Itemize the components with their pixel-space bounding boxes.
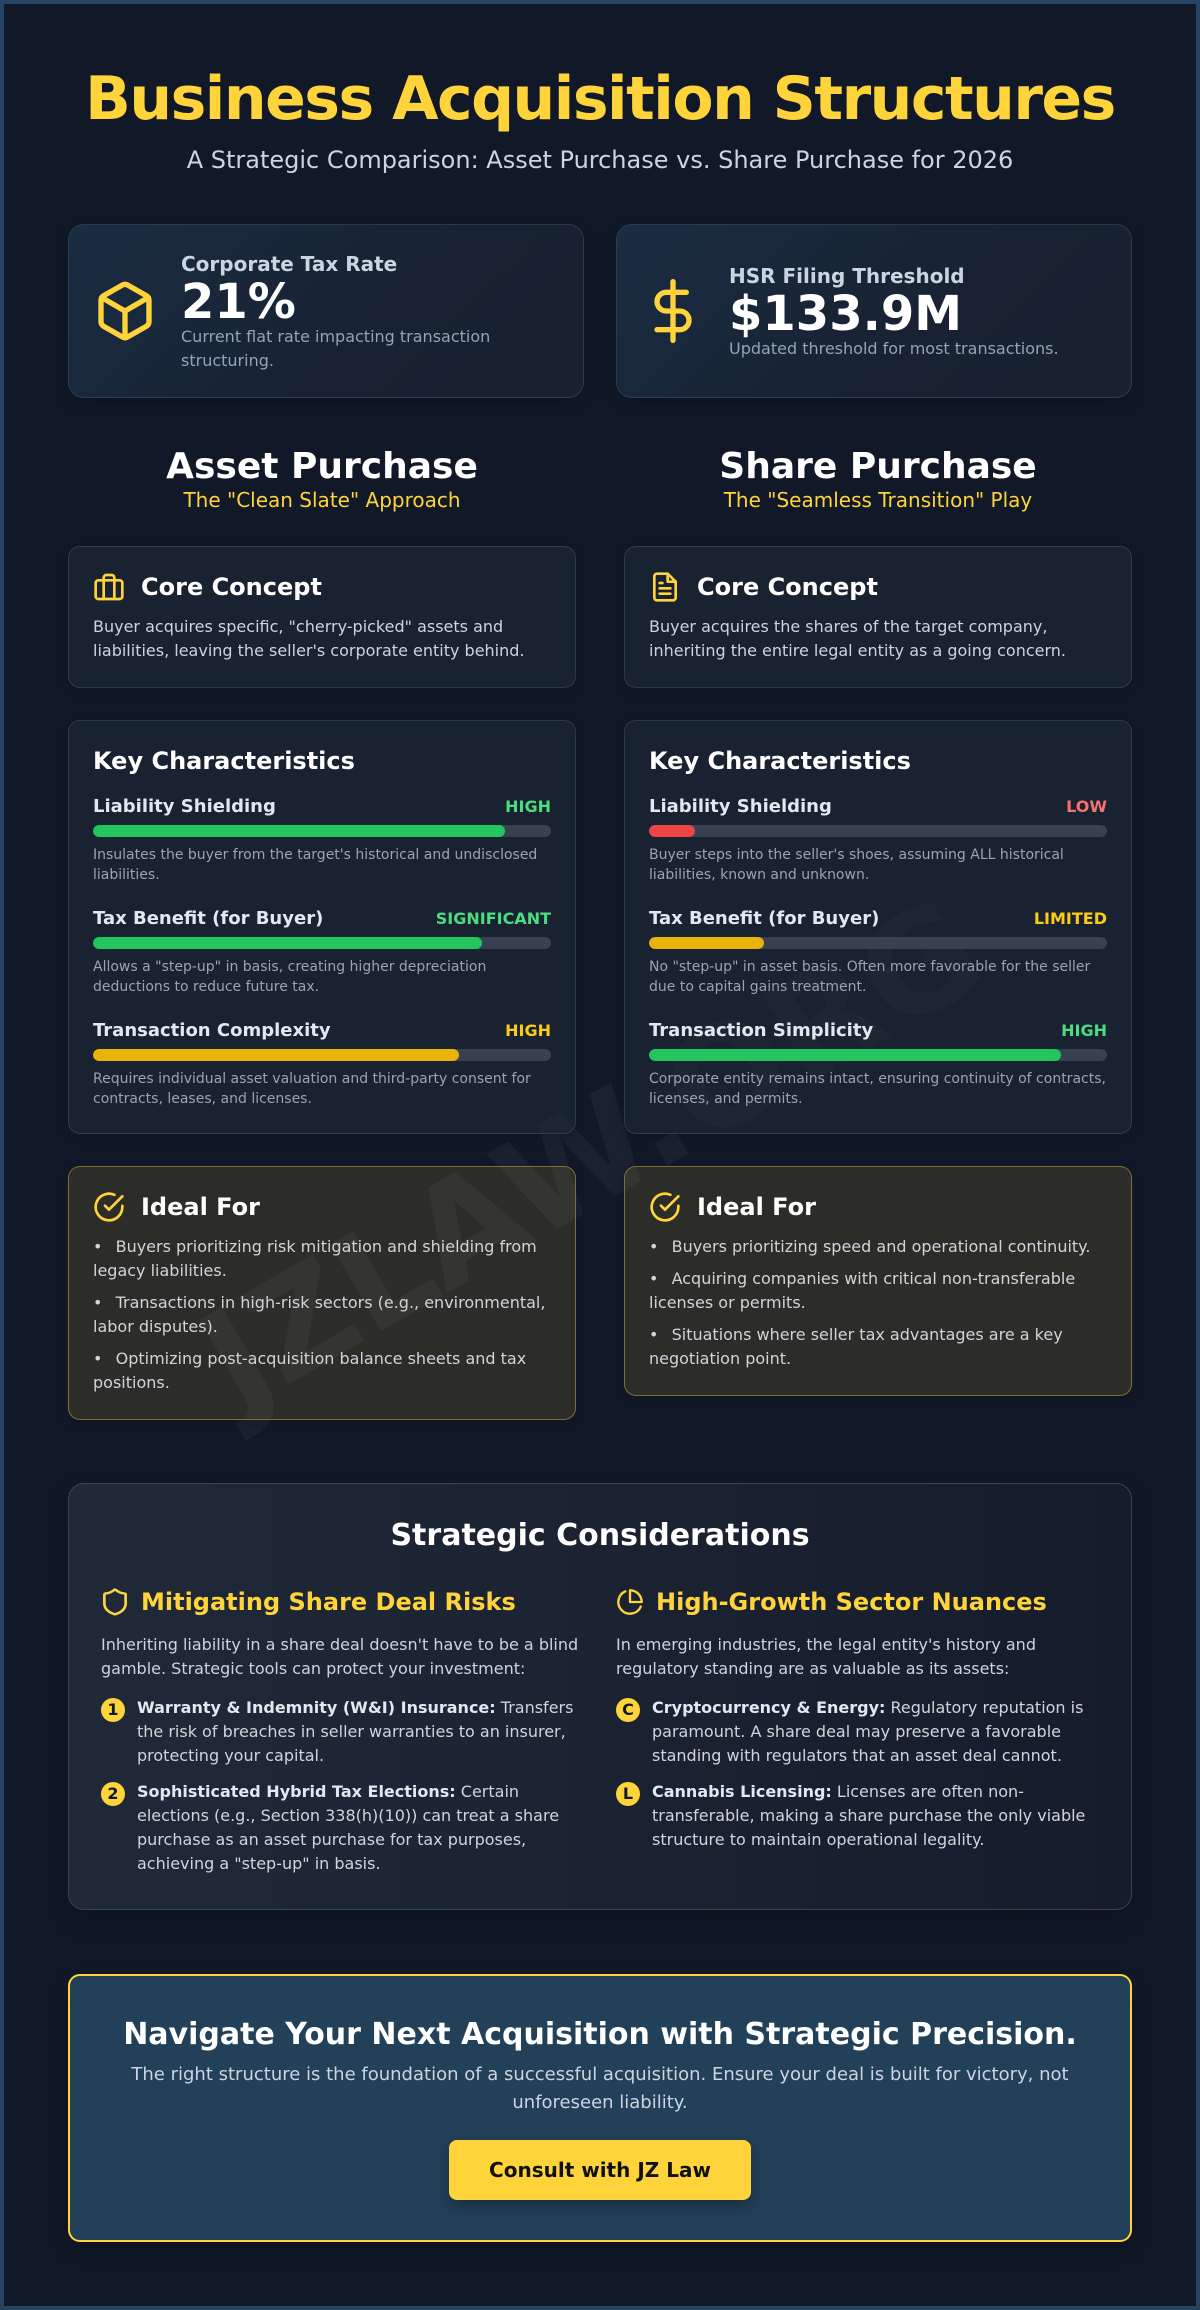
item 1: 1	[107, 1700, 119, 1718]
list: •	[649, 1237, 658, 1256]
title: Business Acquisition Structures	[85, 64, 1115, 134]
meter: liability shielding	[93, 796, 551, 883]
list	[93, 1237, 545, 1392]
list: •	[93, 1237, 102, 1256]
label: HSR filing threshold: HSR Filing Threshold	[729, 264, 965, 288]
item C: Cryptocurrency & Energy: Regulatory reputation is paramount. A share deal may preserve a favorable standing with regulators that an asset deal cannot.	[652, 1698, 1083, 1765]
list: •	[93, 1293, 102, 1312]
subtitle: A Strategic Comparison: Asset Purchase vs. Share Purchase for 2026	[187, 146, 1013, 174]
meter: tax benefit: SIGNIFICANT	[436, 909, 551, 928]
panel: asset ideal for	[68, 1166, 576, 1420]
item L: Cannabis Licensing: Licenses are often non-transferable, making a share purchase the only viable structure to maintain operational legality.	[652, 1782, 1085, 1849]
list: •	[649, 1325, 658, 1344]
meter: liability shielding: LOW	[1066, 797, 1107, 816]
meter: tax benefit: Allows a "step-up" in basis, creating higher depreciation deductions to reduce future tax.	[93, 959, 486, 995]
meter: transaction simplicity: Transaction Simplicity	[649, 1020, 873, 1041]
button: Consult with JZ Law	[489, 2158, 711, 2182]
heading: share purchase: Share Purchase	[719, 446, 1037, 487]
subheading with shield icon: Mitigating Share Deal Risks	[141, 1588, 516, 1616]
column: mitigating share deal risks	[101, 1588, 578, 1873]
list: Optimizing post-acquisition balance sheets and tax positions.	[93, 1349, 526, 1392]
meter: liability shielding: Liability Shielding	[649, 796, 832, 817]
subheading: clean slate: The "Clean Slate" Approach	[183, 488, 461, 512]
panel: share key characteristics	[624, 720, 1132, 1134]
meter: tax benefit: Tax Benefit (for Buyer)	[649, 908, 879, 929]
value: $133.9M: $133.9M	[729, 286, 962, 342]
meter: tax benefit	[649, 908, 1107, 995]
heading with check icon: Ideal For	[141, 1193, 260, 1221]
item 1: Warranty & Indemnity (W&I) Insurance: Transfers the risk of breaches in seller warranties to an insurer, protecting your capital.	[137, 1698, 573, 1765]
heading with document icon: Core Concept	[697, 573, 878, 601]
meter: tax benefit	[93, 908, 551, 995]
list: •	[93, 1349, 102, 1368]
meter: transaction simplicity: Corporate entity remains intact, ensuring continuity of contracts, licenses, and permits.	[649, 1071, 1106, 1107]
heading: Key Characteristics	[649, 746, 911, 774]
description: Updated threshold for most transactions.	[729, 339, 1059, 358]
value: 21%: 21%	[181, 274, 296, 330]
text: The right structure is the foundation of a successful acquisition. Ensure your deal is built for victory, not unforeseen liability.	[131, 2064, 1069, 2113]
meter: transaction complexity: HIGH	[505, 1021, 551, 1040]
panel: corporate tax rate stat	[68, 224, 584, 398]
panel: call to action	[68, 1974, 1132, 2242]
meter: liability shielding: Liability Shielding	[93, 796, 276, 817]
meter: liability shielding: Insulates the buyer from the target's historical and undisclosed liabilities.	[93, 847, 537, 883]
column: high-growth sector nuances	[616, 1588, 1085, 1849]
meter: transaction complexity	[93, 1020, 551, 1107]
item L: L	[623, 1784, 633, 1802]
meter: liability shielding: HIGH	[505, 797, 551, 816]
button	[449, 2140, 751, 2200]
heading with check icon: Ideal For	[697, 1193, 816, 1221]
text: Buyer acquires specific, "cherry-picked" assets and liabilities, leaving the seller's corporate entity behind.	[93, 617, 524, 660]
meter: transaction complexity: Transaction Complexity	[93, 1020, 331, 1041]
list: Acquiring companies with critical non-transferable licenses or permits.	[649, 1269, 1075, 1312]
list	[649, 1237, 1090, 1368]
heading: asset purchase: Asset Purchase	[166, 446, 478, 487]
panel: strategic considerations	[68, 1483, 1132, 1910]
meter: liability shielding	[649, 796, 1107, 883]
panel: asset core concept	[68, 546, 576, 688]
subheading with pie icon: High-Growth Sector Nuances	[656, 1588, 1047, 1616]
meter: liability shielding: Buyer steps into the seller's shoes, assuming ALL historical liabilities, known and unknown.	[649, 847, 1064, 883]
icon: dollar sign	[654, 279, 692, 343]
panel: asset key characteristics	[68, 720, 576, 1134]
heading with briefcase icon: Core Concept	[141, 573, 322, 601]
label: corporate tax rate: Corporate Tax Rate	[181, 252, 397, 276]
meter: transaction simplicity	[649, 1020, 1107, 1107]
meter: transaction complexity: Requires individual asset valuation and third-party consent for contracts, leases, and licenses.	[93, 1071, 531, 1107]
intro text: Inheriting liability in a share deal doesn't have to be a blind gamble. Strategic tools can protect your investment:	[101, 1635, 578, 1678]
list: Buyers prioritizing risk mitigation and shielding from legacy liabilities.	[93, 1237, 537, 1280]
heading: Key Characteristics	[93, 746, 355, 774]
list: •	[649, 1269, 658, 1288]
meter: tax benefit: LIMITED	[1034, 909, 1107, 928]
intro text: In emerging industries, the legal entity's history and regulatory standing are as valuable as its assets:	[616, 1635, 1036, 1678]
text: Buyer acquires the shares of the target company, inheriting the entire legal entity as a going concern.	[649, 617, 1066, 660]
list: Situations where seller tax advantages are a key negotiation point.	[649, 1325, 1063, 1368]
meter: transaction simplicity: HIGH	[1061, 1021, 1107, 1040]
heading: Strategic Considerations	[390, 1518, 810, 1553]
list: Transactions in high-risk sectors (e.g., environmental, labor disputes).	[93, 1293, 545, 1336]
item 2: Sophisticated Hybrid Tax Elections: Certain elections (e.g., Section 338(h)(10)) can treat a share purchase as an asset purchase for tax purposes, achieving a "step-up" in basis.	[137, 1782, 559, 1873]
panel: share ideal for	[624, 1166, 1132, 1396]
item C: C	[622, 1700, 634, 1718]
meter: tax benefit: Tax Benefit (for Buyer)	[93, 908, 323, 929]
icon: box	[98, 282, 152, 340]
meter: tax benefit: No "step-up" in asset basis. Often more favorable for the seller due to capital gains treatment.	[649, 959, 1090, 995]
panel: HSR filing threshold stat	[616, 224, 1132, 398]
heading with check icon	[650, 1192, 816, 1222]
watermark: JZLAW.ORG	[175, 867, 1009, 1442]
subheading: seamless transition: The "Seamless Transition" Play	[724, 488, 1032, 512]
heading with check icon	[94, 1192, 260, 1222]
heading: Navigate Your Next Acquisition with Strategic Precision.	[123, 2016, 1077, 2052]
panel: share core concept	[624, 546, 1132, 688]
item 2: 2	[107, 1784, 119, 1802]
description: Current flat rate impacting transaction structuring.	[181, 327, 490, 370]
list: Buyers prioritizing speed and operational continuity.	[672, 1237, 1090, 1256]
